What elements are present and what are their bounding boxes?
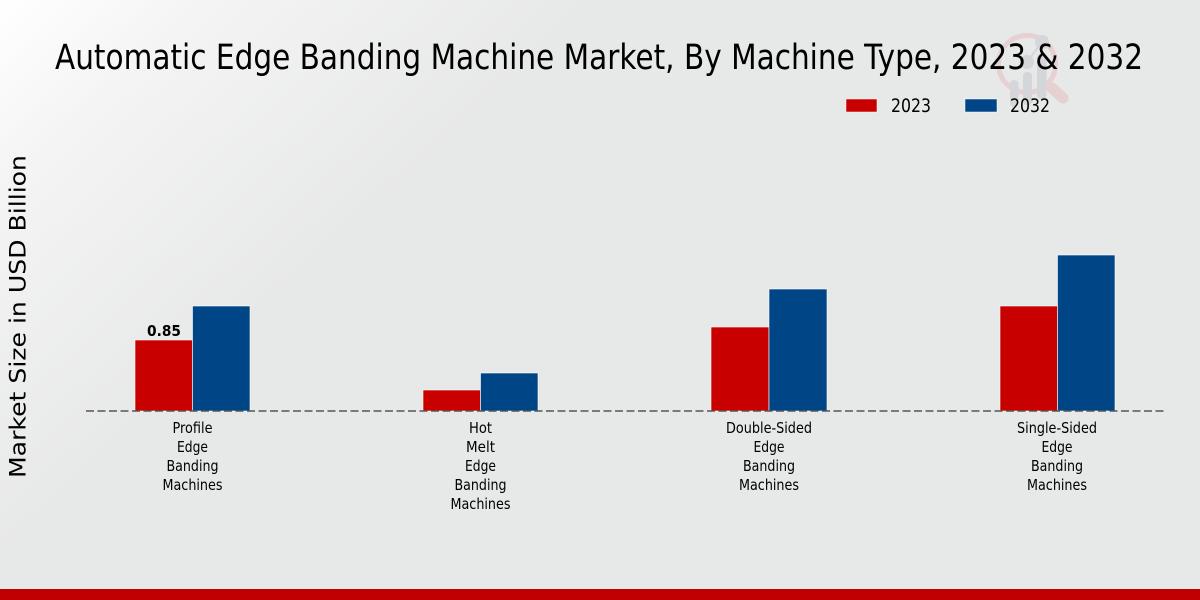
category label: Double-Sided: Double-Sided [726, 419, 812, 437]
bars: Hot Melt Edge Banding Machines [423, 373, 538, 411]
category label: Double-Sided: Edge [754, 438, 784, 456]
category label: Profile: Edge [177, 438, 208, 456]
category label: Hot Melt: Hot [469, 419, 492, 437]
category label: Profile [162, 419, 222, 494]
bars: Double-Sided Edge Banding Machines [711, 289, 827, 411]
y axis title: Market Size in USD Billion [6, 155, 32, 478]
legend label 2032: 2032 [1010, 95, 1050, 117]
category label: Single-Sided: Edge [1042, 438, 1072, 456]
category label: Double-Sided: Banding [743, 457, 795, 475]
category label: Profile: Machines [162, 476, 222, 494]
bars: Profile Edge Banding Machines [135, 306, 250, 411]
category label: Hot Melt: Edge [465, 457, 496, 475]
watermark logo [998, 35, 1063, 107]
category label: Hot Melt: Melt [466, 438, 495, 456]
category label: Double-Sided: Machines [739, 476, 799, 494]
category label: Profile: Banding [166, 457, 218, 475]
category label: Single-Sided: Machines [1027, 476, 1087, 494]
legend swatch 2023 [846, 99, 877, 112]
bar chart [86, 255, 1164, 411]
category label: Double-Sided [726, 419, 812, 494]
category label: Hot Melt: Machines [450, 495, 510, 513]
legend swatch 2032 [965, 99, 997, 112]
category label: Hot Melt: Banding [454, 476, 506, 494]
bars: Single-Sided Edge Banding Machines [1000, 255, 1115, 411]
baseline [86, 410, 1164, 412]
category label: Single-Sided: Single-Sided [1017, 419, 1097, 437]
legend label 2023: 2023 [891, 95, 931, 117]
category label: Single-Sided: Banding [1031, 457, 1083, 475]
category label: Hot Melt [450, 419, 510, 513]
category label: Single-Sided [1017, 419, 1097, 494]
legend [846, 95, 1050, 117]
data label: 0.85 [147, 322, 181, 340]
footer bar [0, 589, 1200, 600]
category label: Profile: Profile [172, 419, 212, 437]
